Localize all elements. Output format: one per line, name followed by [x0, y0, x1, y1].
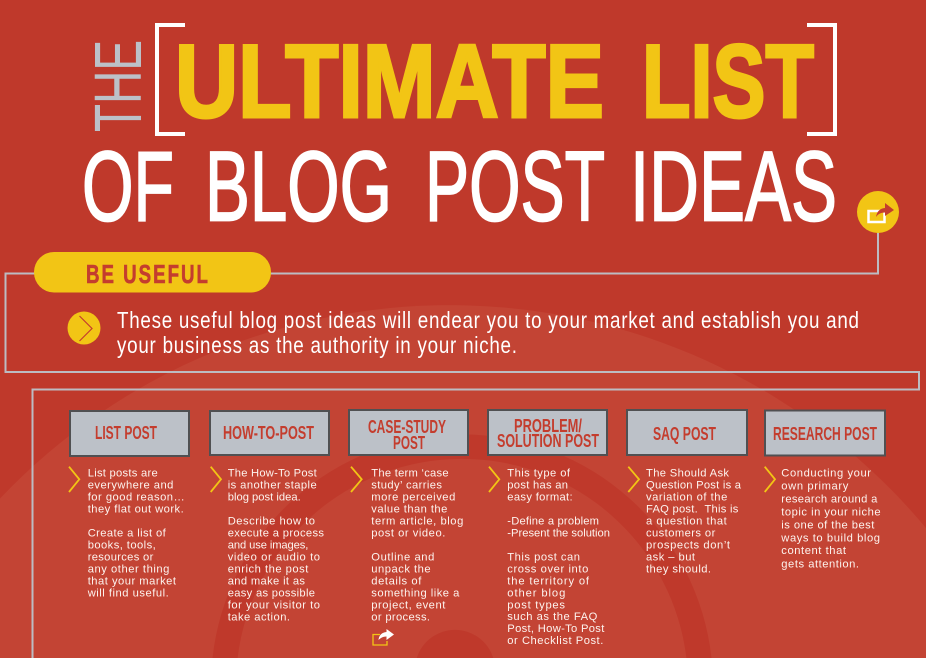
text: saq description: FAQ post. This is — [646, 504, 739, 516]
text: research description: topic in your niche — [781, 506, 881, 518]
panel: saq post — [627, 410, 747, 576]
section pill: be useful: BE USEFUL — [86, 259, 208, 289]
text: how-to post description: easy as possible — [228, 588, 315, 600]
text: case-study description: study’ carries — [371, 480, 442, 492]
text: research description — [780, 468, 881, 570]
text: problem/solution description: the territory of — [507, 576, 590, 588]
text: problem/solution description: cross over into — [507, 564, 588, 576]
text: case-study description: or process. — [371, 612, 430, 624]
text: saq description: Question Post is a — [646, 480, 742, 492]
text: case-study description — [371, 468, 463, 624]
right bracket — [807, 25, 835, 134]
icon: chevron — [351, 467, 362, 492]
text: problem/solution description: post has an — [507, 480, 568, 492]
text: problem/solution description: easy format: — [507, 492, 573, 504]
text: how-to post description: is another staple — [228, 480, 317, 492]
text: case-study description: unpack the — [371, 564, 431, 576]
text: how-to post description: The How-To Post — [228, 468, 318, 480]
text: how-to post description: and make it as — [228, 576, 305, 588]
text: list post description — [87, 468, 185, 600]
heading: saq post — [627, 410, 747, 455]
text: problem/solution description: This type of — [507, 468, 571, 480]
icon: chevron — [69, 467, 79, 492]
title — [81, 24, 837, 242]
text: saq description: prospects don’t — [646, 540, 731, 552]
heading: how-to-post — [210, 411, 329, 455]
text: case-study description: Outline and — [371, 552, 434, 564]
text: case-study description: more perceived — [371, 492, 455, 504]
text: problem/solution description — [507, 468, 610, 647]
panel: list post — [69, 411, 189, 600]
text: research description: research around a — [781, 494, 878, 506]
text: case-study description: post or video. — [371, 528, 445, 540]
text: how-to post description: Describe how to — [228, 516, 315, 528]
text: problem/solution description: Post, How-To Post — [507, 623, 605, 635]
text: research description: gets attention. — [781, 558, 859, 570]
text: how-to post description — [228, 468, 324, 624]
text: list post description: any other thing — [88, 564, 169, 576]
panel: case-study post — [349, 410, 468, 645]
text: saq description: variation of the — [646, 492, 727, 504]
text: research description: Conducting your — [781, 468, 871, 480]
text: problem/solution description: This post can — [507, 552, 580, 564]
text: problem/solution description: or Checklist Post. — [507, 635, 603, 647]
text: saq description: a question that — [646, 516, 728, 528]
text: list post description: that your market — [88, 576, 177, 588]
text: problem/solution description: -Present the solution — [507, 528, 610, 540]
connector frame lines — [6, 230, 919, 658]
text: saq description — [646, 468, 742, 576]
text: saq description: The Should Ask — [646, 468, 729, 480]
text: list post description: resources or — [88, 552, 154, 564]
intro text: your business as the authority in your niche. — [117, 332, 517, 359]
heading: problem/solution post — [488, 410, 607, 455]
text: case-study description: term article, blog — [371, 516, 463, 528]
text: list post description: they flat out work. — [88, 504, 184, 516]
text: problem/solution description: other blog — [507, 588, 565, 600]
text: list post description: Create a list of — [88, 528, 167, 540]
panel: how-to post — [210, 411, 329, 624]
text: problem/solution description: such as the FAQ — [507, 611, 598, 623]
heading: case-study post — [349, 410, 468, 455]
text: case-study description: The term ‘case — [371, 468, 449, 480]
text: how-to post description: enrich the post — [228, 564, 309, 576]
heading: research post: RESEARCH POST — [773, 424, 877, 444]
text: research description: ways to build blog — [780, 532, 880, 544]
heading: how-to-post: HOW-TO-POST — [223, 423, 314, 443]
heading: list post — [70, 411, 189, 456]
title word: POST: POST — [425, 130, 605, 242]
intro text: These useful blog post ideas will endear you to your market and establish you and — [117, 307, 859, 334]
heading: saq post: SAQ POST — [653, 424, 716, 444]
icon: chevron — [628, 467, 639, 492]
text: how-to post description: for your visitor to — [228, 600, 320, 612]
text: case-study description: details of — [371, 576, 422, 588]
icon: chevron — [765, 467, 775, 492]
icon: chevron — [211, 467, 221, 492]
text: research description: is one of the best — [781, 519, 875, 531]
text: how-to post description: and use images, — [228, 540, 308, 552]
section pill: be useful — [34, 252, 271, 292]
icon: chevron — [489, 467, 499, 492]
text: how-to post description: execute a process — [228, 528, 324, 540]
text: list post description: everywhere and — [88, 480, 173, 492]
text: case-study description: something like a — [371, 588, 460, 600]
panel: research post — [765, 410, 885, 570]
heading: list post: LIST POST — [95, 423, 157, 443]
panel: problem/solution post — [488, 410, 610, 647]
text: case-study description: project, event — [371, 600, 446, 612]
title word: IDEAS: IDEAS — [630, 130, 837, 242]
icon: small share — [373, 629, 394, 645]
left bracket — [157, 25, 185, 134]
text: problem/solution description: post types — [507, 600, 565, 612]
text: list post description: books, tools, — [88, 540, 156, 552]
text: how-to post description: blog post idea. — [228, 492, 301, 504]
heading: case-study post: POST — [393, 433, 425, 453]
title word: OF: OF — [82, 130, 174, 242]
title word: LIST: LIST — [642, 24, 814, 140]
text: saq description: they should. — [646, 564, 711, 576]
heading: problem/solution post: PROBLEM/ — [514, 416, 582, 436]
intro text — [117, 307, 859, 359]
text: problem/solution description: -Define a problem — [507, 516, 599, 528]
text: research description: own primary — [781, 480, 849, 492]
icon: intro arrow circle — [68, 312, 100, 344]
text: list post description: for good reason… — [88, 492, 185, 504]
text: saq description: customers or — [646, 528, 716, 540]
text: list post description: will find useful. — [87, 588, 169, 600]
heading: case-study post: CASE-STUDY — [368, 417, 446, 437]
text: saq description: ask – but — [646, 552, 696, 564]
heading: research post — [765, 410, 885, 456]
text: list post description: List posts are — [88, 468, 158, 480]
heading: problem/solution post: SOLUTION POST — [497, 431, 599, 451]
text: case-study description: value than the — [371, 504, 447, 516]
icon: share circle — [857, 191, 899, 233]
title word: THE: THE — [81, 40, 156, 132]
title word: ULTIMATE: ULTIMATE — [175, 24, 604, 140]
text: research description: content that — [781, 545, 847, 557]
text: how-to post description: video or audio to — [228, 552, 320, 564]
text: how-to post description: take action. — [228, 612, 290, 624]
title word: BLOG: BLOG — [205, 130, 392, 242]
